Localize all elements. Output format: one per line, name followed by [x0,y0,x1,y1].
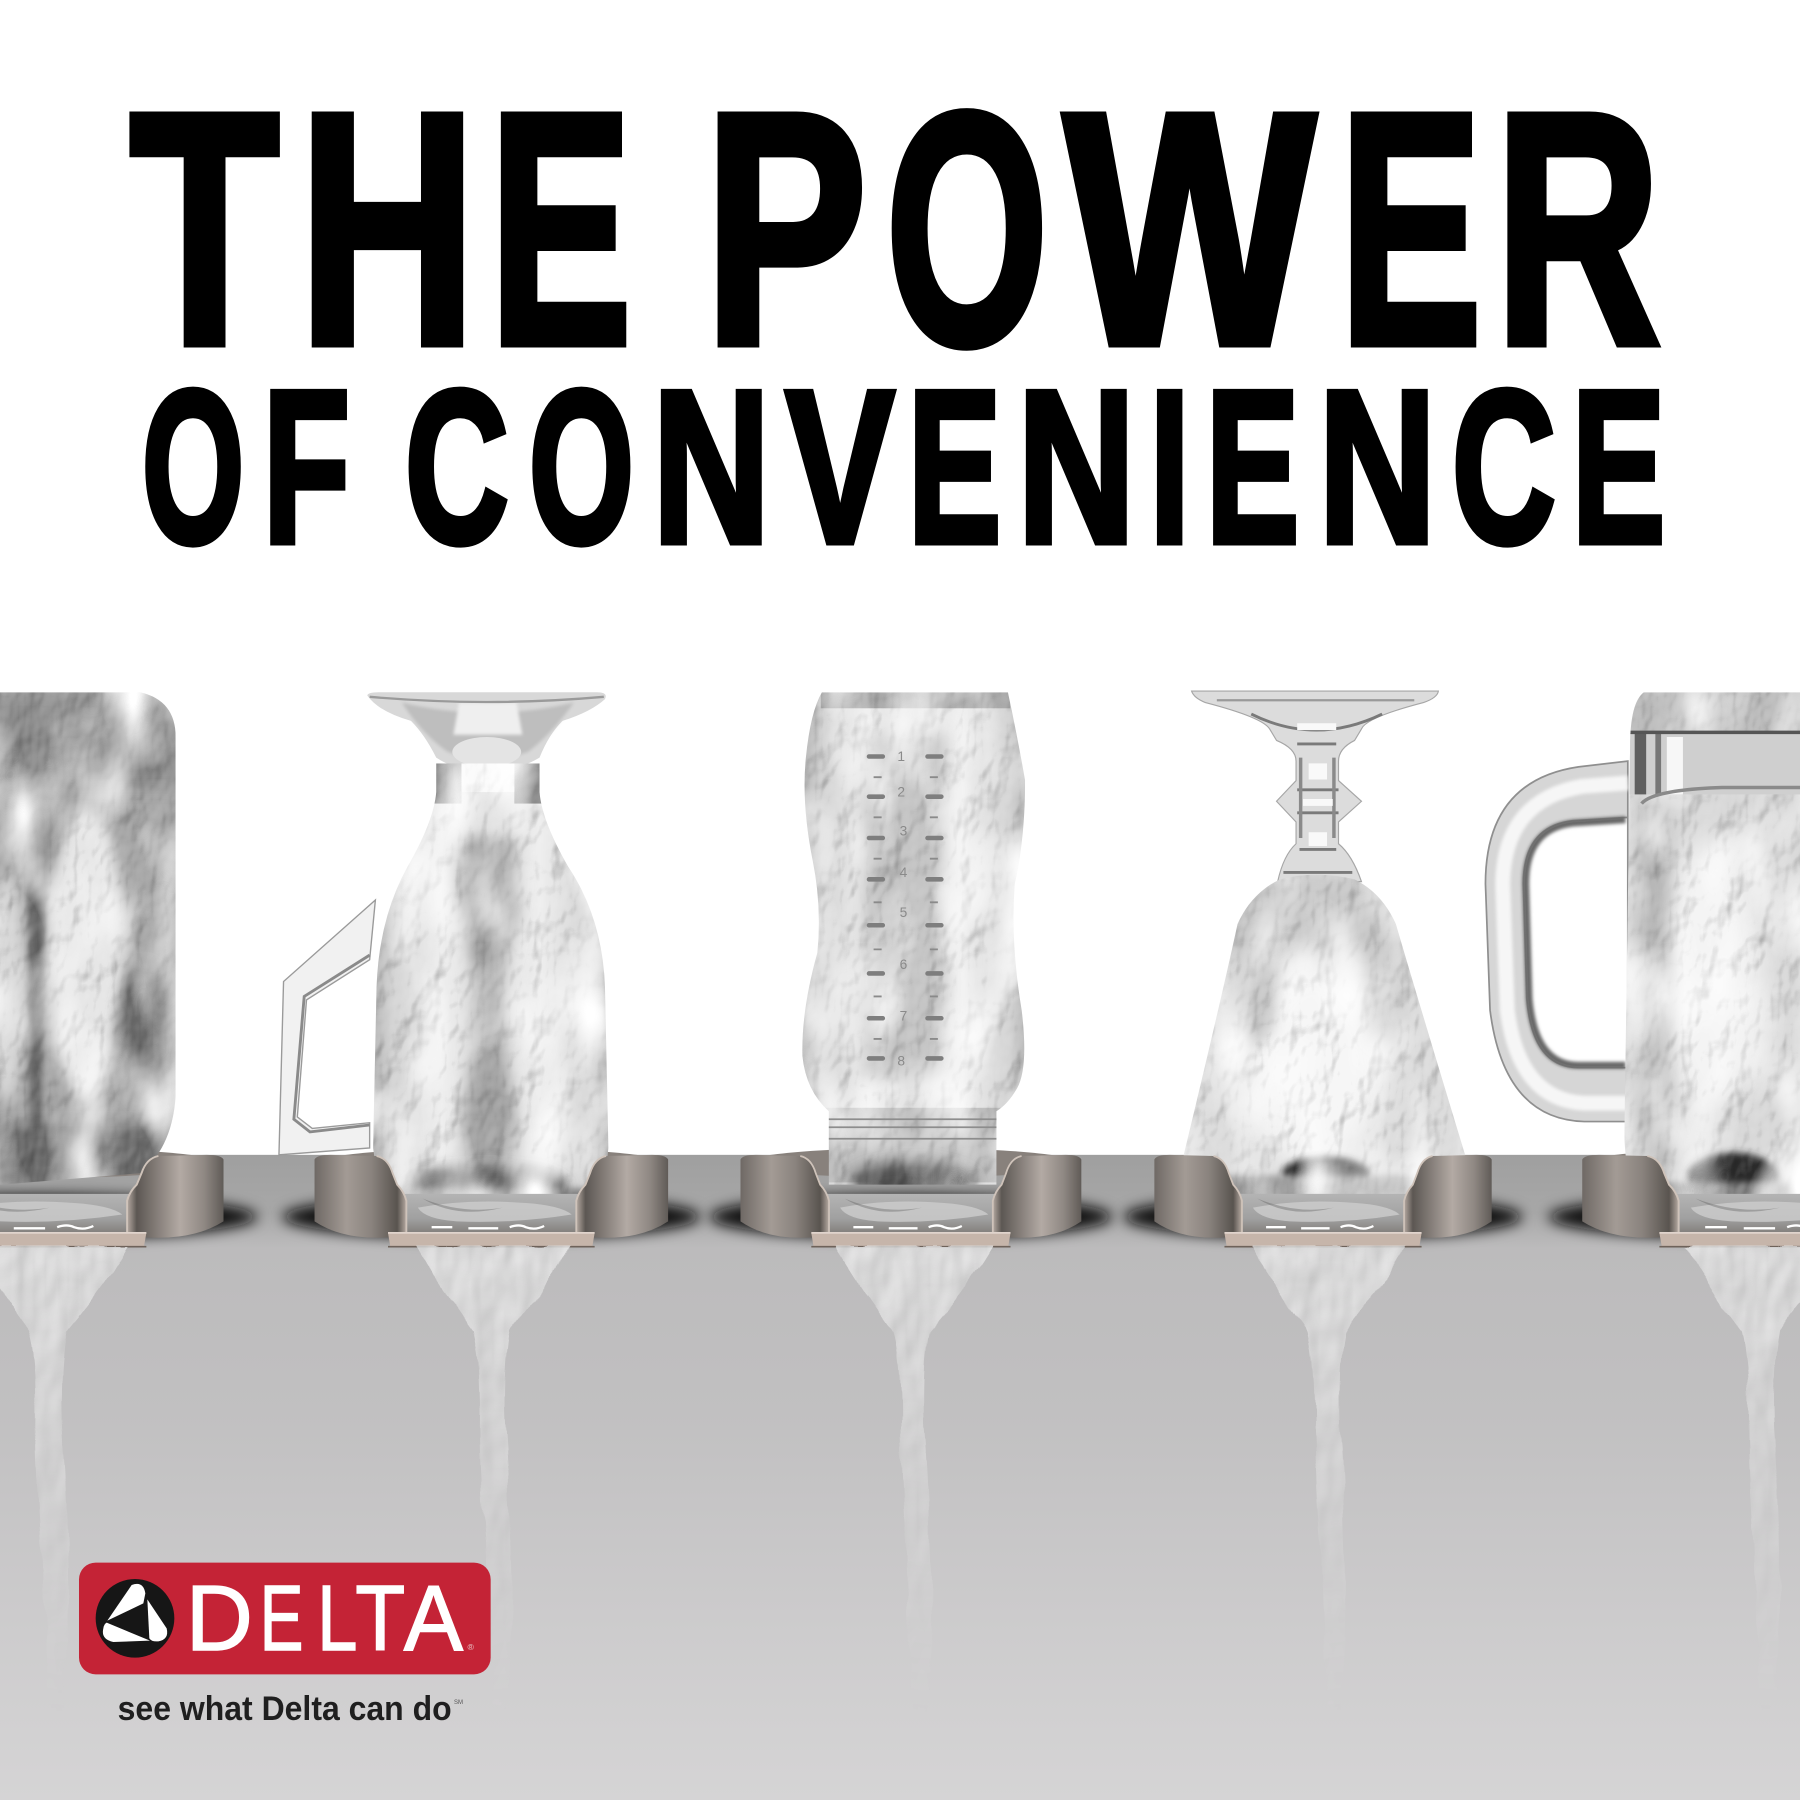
rinser back: item 5 [1548,1148,1800,1239]
glass: goblet foot and stem [1192,691,1438,882]
baby bottle measurement marks [869,749,941,1068]
baby bottle measurement marks: 2 [897,785,905,800]
baby bottle measurement marks: 8 [897,1053,905,1068]
title line 2: C [405,346,509,588]
glass: milk bottle body [367,758,614,1211]
product scene: glassware on rinsers with water [0,690,1800,1800]
title line 1: O [886,44,1048,413]
rinser front: item 4 [1154,1155,1492,1247]
baby bottle measurement marks: 6 [900,957,908,972]
rinser back: item 3 [709,1148,1112,1239]
title line 1: P [705,44,867,413]
title line 1: T [130,44,279,413]
logo: DELTA wordmark: A [404,1566,463,1670]
baby bottle measurement marks: 7 [900,1009,907,1024]
glass: beer mug handle [1485,761,1628,1122]
glass: baby bottle body [798,689,1033,1203]
water stream: item 4 [1250,1246,1406,1722]
baby bottle measurement marks: 3 [900,824,908,839]
water stream: item 1 [0,1246,129,1722]
title line 2: N [653,346,770,588]
logo: red badge [79,1563,491,1674]
logo: DELTA wordmark: T [355,1566,405,1670]
title line 2: E [908,346,1002,588]
water stream: item 5 [1684,1246,1800,1722]
baby bottle measurement marks: 4 [900,865,908,880]
baby bottle measurement marks: 1 [897,749,905,764]
rinser front: item 3 [740,1155,1081,1247]
rinser front: item 1 [0,1155,224,1247]
rinser front: item 2 [315,1155,668,1247]
tagline: see what Delta can do [118,1690,452,1728]
background: grey surface [0,1155,1800,1800]
title line 1: E [1340,44,1482,413]
title line 2: E [1572,346,1666,588]
title line 1 [129,44,1662,413]
rinser back: item 2 [282,1148,700,1239]
title line 1: H [299,44,476,413]
title line 2: N [1018,346,1136,588]
title line 2: F [262,346,349,588]
logo: DELTA wordmark: L [317,1566,358,1670]
background: white wall [0,0,1800,1159]
glass: mason jar [0,689,184,1194]
title line 2 [142,346,1666,588]
rinser front: item 5 [1582,1155,1800,1247]
Delta logo [79,1563,491,1728]
logo: DELTA wordmark [186,1566,464,1670]
water stream: item 2 [416,1246,572,1722]
title line 2: I [1150,346,1190,588]
title line 1: R [1495,44,1660,413]
baby bottle measurement marks: 5 [900,905,908,920]
glass: goblet bowl [1184,875,1466,1194]
water stream: item 3 [836,1246,992,1722]
rinser back: item 1 [0,1148,257,1239]
glass: milk bottle handle [279,900,375,1155]
rinser back: item 4 [1124,1148,1522,1239]
logo: DELTA wordmark: D [186,1566,253,1670]
tagline service mark: SM [454,1700,463,1706]
title line 1: W [1064,44,1315,413]
title line 2: O [142,346,244,588]
title line 1: E [490,44,632,413]
title line 2: O [529,346,634,588]
glass: milk bottle top [367,692,606,771]
logo: triangle emblem [96,1579,174,1658]
glass: beer mug body [1619,689,1800,1205]
title line 2: E [1206,346,1300,588]
logo: registered mark: ® [467,1642,474,1652]
title line 2: N [1319,346,1437,588]
logo: DELTA wordmark: E [260,1566,303,1670]
title line 2: V [786,346,895,588]
title line 2: C [1452,346,1556,588]
